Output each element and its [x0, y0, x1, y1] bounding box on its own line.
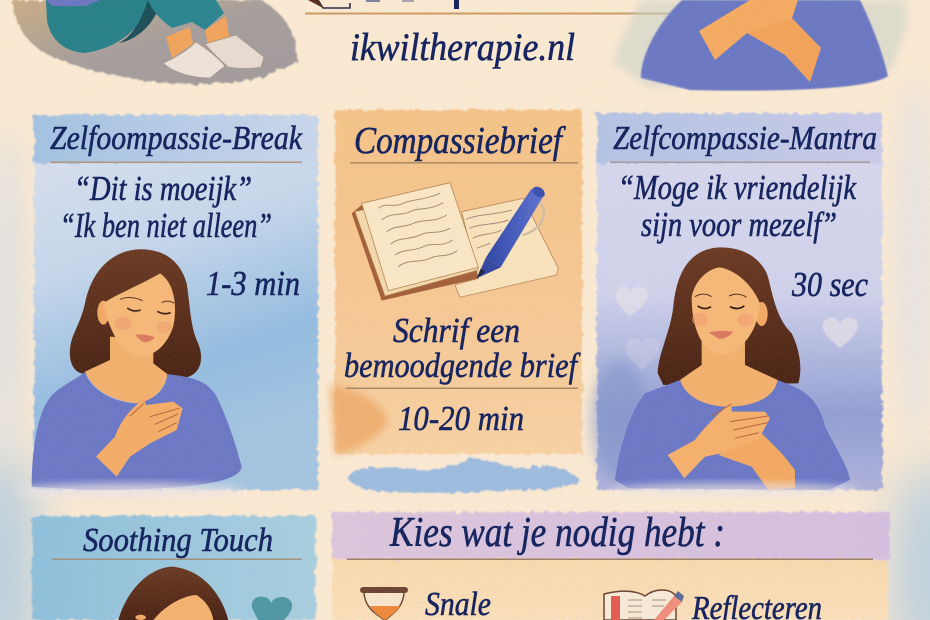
icon: book and pencil	[604, 590, 684, 620]
panel: Zelfcompassie-Mantra	[592, 113, 882, 497]
panel heading: Kies wat je nodig hebt :	[389, 510, 725, 556]
sweater	[641, 0, 888, 91]
panel background	[34, 115, 318, 490]
panel: Compassiebrief	[330, 110, 582, 493]
mantra text: sijn voor mezelf”	[641, 205, 837, 244]
legs and trousers	[46, 0, 230, 58]
quote text: “Ik ben niet alleen”	[60, 206, 272, 245]
bottom feather wash	[15, 483, 245, 499]
instruction text: Schrif een	[393, 311, 520, 350]
illustration: woman with both hands on heart	[615, 247, 850, 490]
top centre heading remnants	[305, 0, 670, 14]
website url: ikwiltherapie.nl	[350, 26, 575, 69]
quote text: “Dit is moeijk”	[74, 169, 252, 208]
mantra text: “Moge ik vriendelijk	[618, 168, 857, 207]
illustration: seated person (top left)	[13, 0, 298, 84]
bottom feather wash	[610, 483, 860, 497]
instruction text	[344, 311, 581, 385]
illustration: woman's head	[118, 567, 228, 620]
watercolour backdrop	[612, 0, 908, 88]
orange wash	[330, 385, 388, 455]
arms and hands	[699, 0, 821, 82]
panel heading: Compassiebrief	[354, 120, 566, 162]
panel: Kies wat je nodig hebt	[332, 510, 890, 620]
lower-left shade	[592, 360, 648, 480]
sweater	[46, 0, 100, 6]
icon: hourglass	[360, 587, 408, 620]
panel background	[597, 113, 882, 490]
ground shadow	[13, 0, 298, 84]
duration: 10-20 min	[398, 399, 524, 438]
duration: 30 sec	[791, 265, 868, 304]
shoes	[163, 35, 264, 78]
panel background	[32, 516, 316, 620]
hearts	[616, 287, 858, 370]
panel heading: Zelfcompassie-Mantra	[613, 120, 877, 157]
panel background	[335, 110, 582, 454]
panel heading: Zelfoompassie-Break	[50, 120, 303, 157]
duration: 1-3 min	[206, 264, 300, 303]
illustration: open book and pen	[352, 183, 558, 301]
mantra text	[618, 168, 857, 244]
quote text	[60, 169, 272, 245]
panel background	[332, 512, 890, 620]
panel: Zelfcompassie-Break	[15, 115, 318, 499]
panel heading: Soothing Touch	[83, 522, 273, 559]
instruction text: bemoodgende brief	[344, 346, 581, 385]
illustration: hands on heart (top right)	[612, 0, 908, 91]
icon: teal heart	[252, 597, 292, 620]
panel: Soothing Touch	[32, 516, 316, 620]
blue watercolour wash	[347, 458, 580, 493]
illustration: woman with hand on heart	[32, 249, 242, 490]
